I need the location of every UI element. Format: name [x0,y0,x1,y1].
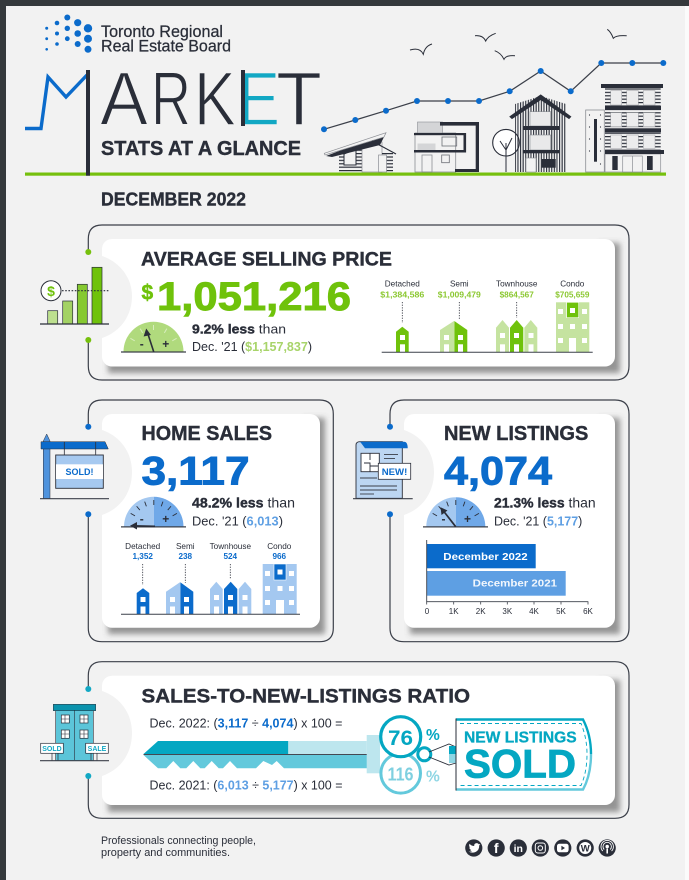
big number: 3,117 [142,449,250,493]
key graphic [144,717,456,793]
icon: bar chart with dollar [40,267,109,324]
birds [410,29,627,59]
comparison text: 48.2% less than [192,495,295,511]
gauge [121,322,186,352]
line chart [321,60,666,132]
big number: 4,074 [444,449,553,493]
card [102,414,320,628]
tree [493,129,519,172]
gauge: + [162,512,169,526]
logo: Toronto Regional Real Estate Board: Toronto Regional [101,23,223,41]
logo: Toronto Regional Real Estate Board: Real Estate Board [101,38,231,56]
home type prices: $1,009,479 [438,291,481,300]
panel: average selling price [40,225,629,380]
comparison text [192,495,295,529]
gauge: - [140,337,144,351]
big number: $ [142,282,154,304]
panel: sales-to-new-listings ratio [40,662,629,818]
tagline [101,835,256,859]
home type prices: Semi [450,280,469,289]
gauge: + [464,512,471,526]
2021 formula: Dec. 2021: (6,013 ÷ 5,177) x 100 = [150,778,342,792]
social icons: W [581,844,590,854]
icon: sold sign: SOLD! [66,467,94,477]
house 1 [324,133,396,172]
title: MARKET: T [276,57,322,142]
home type sales: Townhouse [210,542,251,551]
home type sales: Semi [176,542,195,551]
bar chart: 1K [449,607,459,616]
panel outline [88,400,333,642]
title: MARKET: E [238,57,280,142]
comparison text: Dec. '21 (5,177) [494,514,582,529]
home type sales: 1,352 [132,552,153,561]
home type prices: Townhouse [496,280,538,289]
sold tag: NEW LISTINGS [464,730,577,747]
home type prices: Detached [385,280,420,289]
house 3 [510,95,571,172]
bar chart: 2K [476,607,486,616]
title: MARKET: A [100,57,148,142]
home type prices [380,280,593,352]
panel outline [88,662,629,818]
icon: listing document: NEW! [382,467,407,478]
title: MARKET: R [151,57,191,142]
bar chart: 3K [502,607,513,616]
heading: HOME SALES [142,422,272,445]
sold tag [456,718,592,790]
bar chart: December 2021 [473,578,557,590]
key graphic: % [426,727,440,744]
house 2 [414,122,479,172]
home type sales: 524 [223,552,238,561]
panel: new listings [353,400,629,642]
comparison text [494,495,596,529]
skyline illustration [321,29,666,172]
logo: Toronto Regional Real Estate Board [45,14,231,56]
heading: NEW LISTINGS [444,422,588,445]
bar chart [425,540,594,616]
tagline: Professionals connecting people, [101,835,256,847]
comparison text: 9.2% less than [192,321,286,336]
2022 formula: Dec. 2022: (3,117 ÷ 4,074) x 100 = [150,716,342,730]
home type prices: Condo [560,280,585,289]
comparison text [192,321,312,354]
icon: building with sold and sale signs: SOLD [42,746,62,753]
heading: SALES-TO-NEW-LISTINGS RATIO [142,685,470,707]
home type sales: 238 [178,552,193,561]
title: MARKET: K [194,57,236,142]
social icons: f [494,840,499,856]
icon: building with sold and sale signs [40,704,109,761]
home type prices: $705,659 [555,291,590,300]
icon: listing document [353,442,413,499]
home type prices: $1,384,586 [380,291,425,300]
gauge [423,497,488,527]
panel: home sales [40,400,333,642]
gauge: - [442,512,446,526]
comparison text: Dec. '21 ($1,157,837) [192,340,312,354]
bar chart: 6K [583,607,594,616]
home type sales: 966 [272,552,287,561]
panel outline [88,225,629,380]
subtitle: STATS AT A GLANCE [101,138,301,160]
card [102,676,615,805]
big number: 1,051,216 [157,275,351,319]
title: MARKET [25,57,322,175]
key graphic: 76 [388,727,413,750]
gauge: + [162,337,169,351]
key graphic: % [426,769,440,786]
tagline: property and communities. [101,847,230,859]
icon: bar chart with dollar: $ [47,283,55,299]
bar chart: 5K [556,607,567,616]
heading: AVERAGE SELLING PRICE [141,249,392,271]
sold tag: SOLD [464,742,576,786]
key graphic: 116 [388,765,414,785]
home type sales: Condo [267,542,292,551]
comparison text: Dec. '21 (6,013) [192,514,283,529]
green ground line [25,172,666,176]
bar chart: 0 [425,607,430,616]
home type sales: Detached [125,542,161,551]
bar chart: December 2022 [443,551,528,563]
gauge: - [140,512,144,526]
card [102,239,615,366]
comparison text: 21.3% less than [494,495,596,511]
apartment building [586,84,664,172]
gauge [121,497,186,530]
social icons: in [514,843,523,855]
panel outline [390,400,629,642]
bar chart: 4K [529,607,540,616]
icon: building with sold and sale signs: SALE [88,746,107,753]
home type sales [121,542,300,614]
home type prices: $864,567 [500,291,534,300]
social icons [465,839,616,857]
date heading: DECEMBER 2022 [101,190,246,210]
card [404,414,615,628]
icon: sold sign [40,434,109,499]
